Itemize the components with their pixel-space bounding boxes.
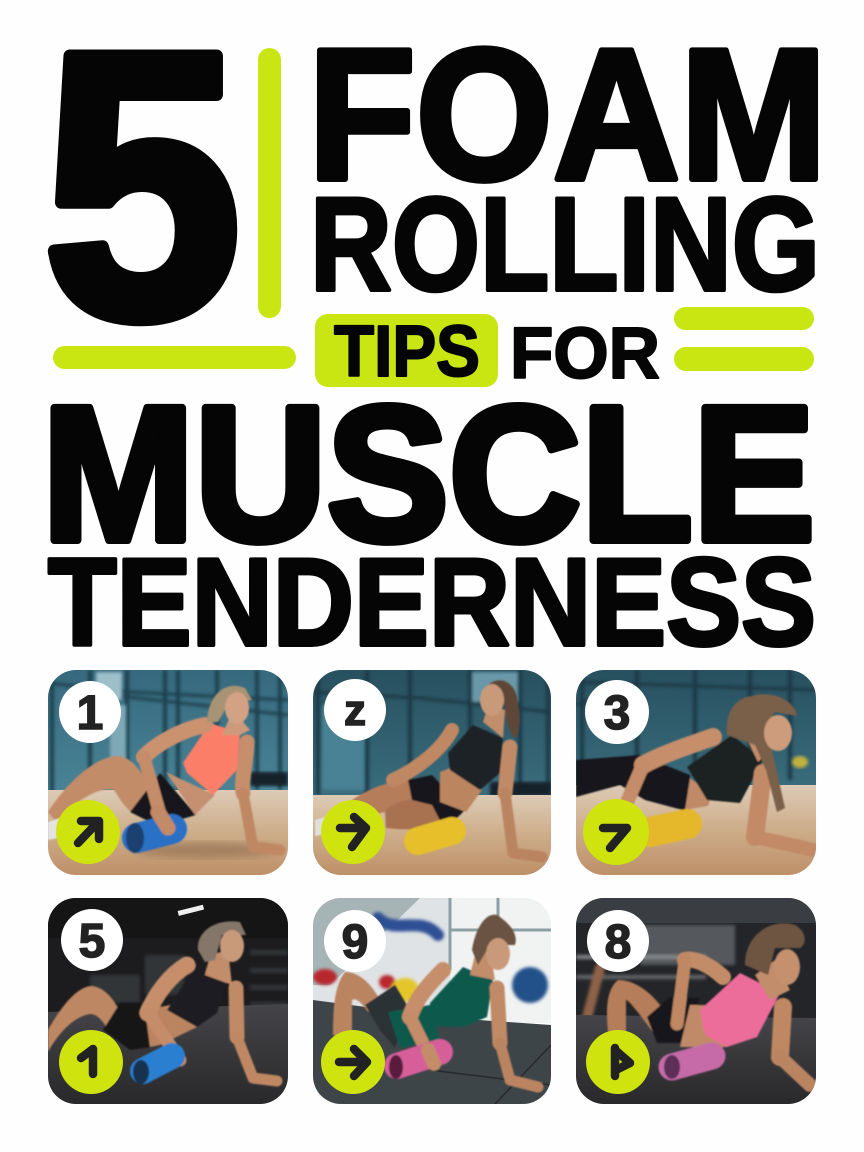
- number badge 9: [324, 910, 386, 972]
- heading: FOAM: FOAM: [308, 10, 827, 219]
- panel: tip 2: [313, 670, 551, 875]
- heading: FOR: FOR: [510, 314, 660, 394]
- number badge 3: 3: [604, 687, 630, 740]
- panel: tip 5: [48, 898, 288, 1104]
- arrow badge: [586, 1030, 650, 1094]
- arrow badge: [321, 1030, 385, 1094]
- number badge 8: [587, 910, 649, 972]
- highlight pill: TIPS: TIPS: [334, 312, 480, 392]
- arrow badge: [59, 1030, 123, 1094]
- heading: MUSCLE: MUSCLE: [42, 366, 815, 581]
- number badge 5: [61, 909, 123, 971]
- photo: woman on yellow roller: [313, 670, 551, 875]
- arrow badge: [583, 799, 649, 865]
- number badge 8: 8: [605, 916, 631, 969]
- number badge 2: z: [344, 686, 366, 735]
- number badge 3: [585, 680, 649, 744]
- panel: tip 1: [48, 670, 288, 875]
- number badge 1: 1: [77, 687, 103, 740]
- vertical lime bar: [258, 48, 281, 318]
- photo: woman on pink roller in dark gym: [576, 898, 816, 1104]
- photo: woman on yellow roller, forearm: [576, 670, 816, 875]
- title: [42, 0, 827, 672]
- photo: woman on blue roller in dark gym: [48, 898, 288, 1104]
- double lime bars: [674, 307, 814, 371]
- horizontal lime bar: [53, 346, 296, 369]
- panel: tip 8: [576, 898, 816, 1104]
- number badge 1: [59, 681, 121, 743]
- number badge 2: [324, 679, 386, 741]
- panel: tip 9: [313, 898, 551, 1104]
- panel: tip 3: [576, 670, 816, 875]
- photo: woman on blue roller: [48, 670, 288, 875]
- number badge 5: 5: [79, 915, 105, 968]
- arrow badge: [321, 800, 385, 864]
- photo: woman on pink roller in bright gym: [313, 898, 551, 1104]
- number badge 9: 9: [342, 916, 368, 969]
- arrow badge: [56, 800, 120, 864]
